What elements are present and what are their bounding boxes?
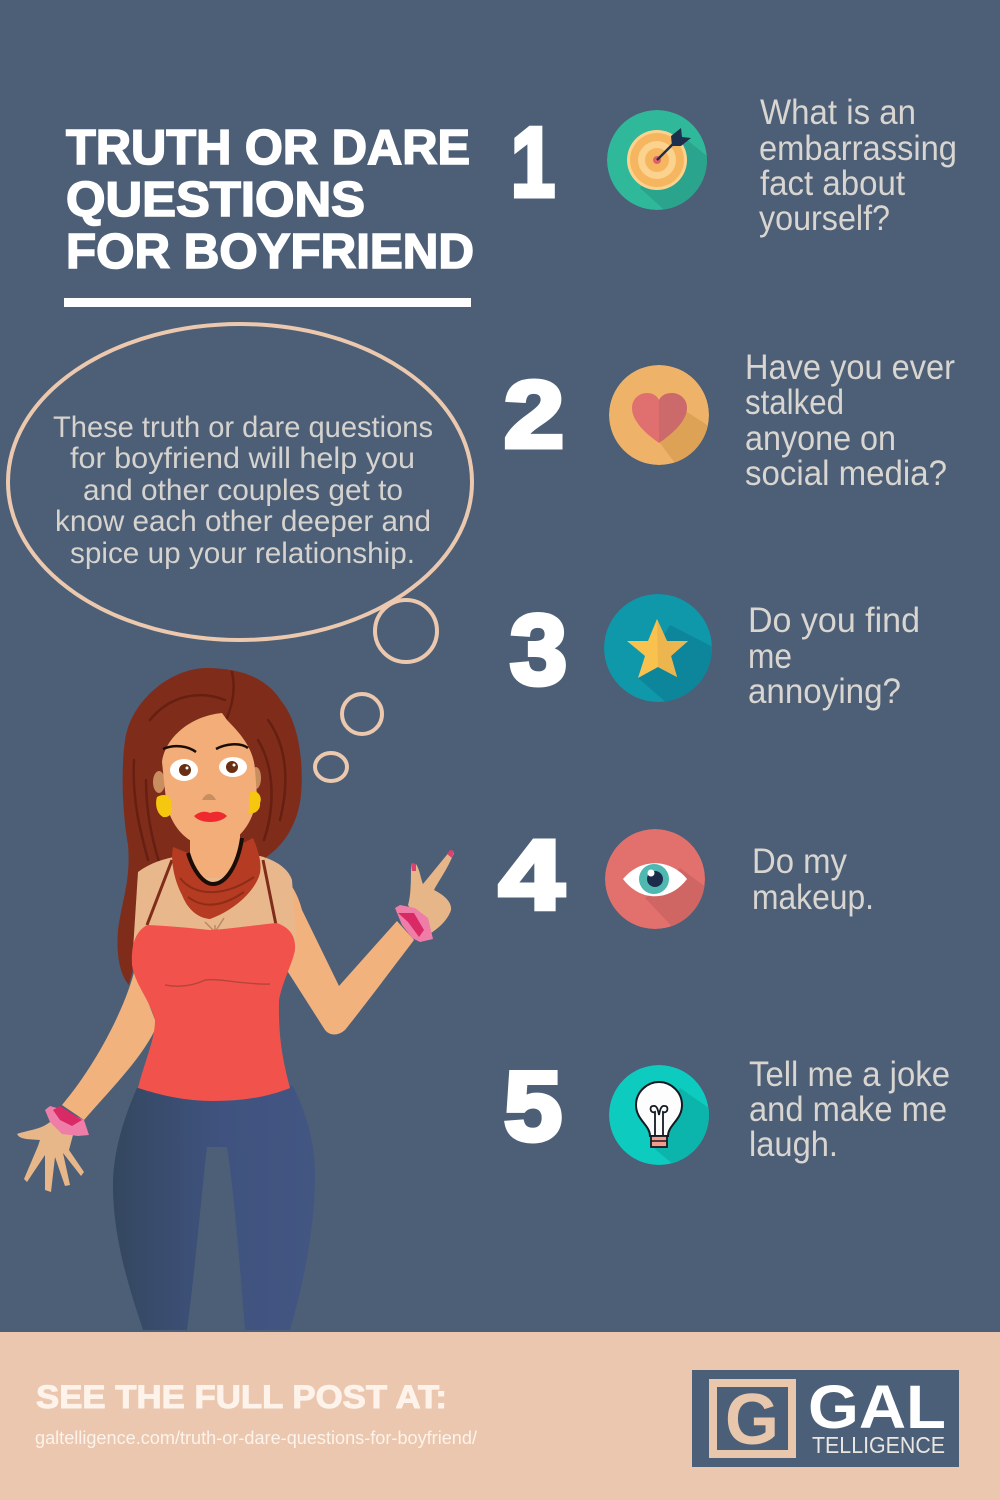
icon: light bulb <box>609 1065 712 1170</box>
question 4: Do my <box>752 842 847 881</box>
number 5: 5 <box>504 1051 562 1161</box>
icon: eye <box>605 829 705 929</box>
question 1: embarrassing <box>759 129 957 168</box>
bubble text: know each other deeper and <box>55 505 431 538</box>
eyes <box>170 757 247 781</box>
left scrunchie <box>45 1106 89 1136</box>
right hand <box>408 851 454 935</box>
number 3: 3 <box>510 594 567 705</box>
title: FOR BOYFRIEND <box>66 225 474 279</box>
number 1: 1 <box>511 107 555 217</box>
logo: TELLIGENCE <box>812 1432 945 1458</box>
top fold line <box>165 980 270 986</box>
bubble text: spice up your relationship. <box>70 537 415 570</box>
question 1: What is an <box>760 93 916 132</box>
lips <box>194 812 227 822</box>
title <box>66 121 474 279</box>
bubble text <box>53 411 433 570</box>
left arm <box>62 968 157 1120</box>
logo <box>692 1370 959 1467</box>
question 3: annoying? <box>748 672 901 711</box>
right arm <box>285 878 414 1034</box>
face <box>162 713 257 847</box>
question 3 <box>748 601 920 711</box>
right scrunchie <box>395 905 433 942</box>
thought bubble <box>8 324 472 781</box>
question 2: stalked <box>745 383 844 422</box>
icon: heart <box>609 365 709 465</box>
question 5 <box>749 1055 950 1164</box>
number 4: 4 <box>499 820 564 930</box>
neck <box>190 825 240 878</box>
logo: G <box>725 1380 779 1460</box>
fingernails <box>411 850 454 871</box>
character: woman pointing <box>17 668 454 1330</box>
question 4 <box>752 842 874 917</box>
halter straps <box>147 860 276 925</box>
earrings <box>156 792 261 817</box>
hair back <box>117 668 302 985</box>
scarf <box>172 838 261 919</box>
question 4: makeup. <box>752 878 874 917</box>
icon: target <box>607 110 712 215</box>
question 1: fact about <box>760 164 905 203</box>
footer call to action: SEE THE FULL POST AT: <box>36 1379 447 1415</box>
jeans <box>113 1086 315 1330</box>
hair strands <box>134 672 285 865</box>
icon: star <box>604 594 715 710</box>
bubble text: and other couples get to <box>83 474 403 507</box>
question 2: anyone on <box>745 419 896 458</box>
question 3: Do you find <box>748 601 920 640</box>
footer url: galtelligence.com/truth-or-dare-questions-for-boyfriend/ <box>35 1428 477 1448</box>
chest <box>133 856 297 950</box>
bubble text: These truth or dare questions <box>53 411 433 444</box>
question 2: social media? <box>745 454 947 493</box>
question 2: Have you ever <box>745 348 955 387</box>
question 2 <box>745 348 955 493</box>
ears <box>153 771 165 793</box>
eyebrows <box>163 744 248 752</box>
nose <box>202 794 216 800</box>
left hand <box>17 1122 84 1192</box>
question 1: yourself? <box>759 199 890 238</box>
logo: GAL <box>808 1373 946 1441</box>
neck shadow <box>188 838 242 884</box>
question 5: laugh. <box>749 1125 838 1164</box>
red top <box>132 923 295 1101</box>
question 5: and make me <box>749 1090 947 1129</box>
scarf folds <box>180 877 254 905</box>
question 5: Tell me a joke <box>749 1055 950 1094</box>
bubble text: for boyfriend will help you <box>70 442 415 475</box>
title: TRUTH OR DARE <box>66 121 470 175</box>
necklace <box>205 918 224 944</box>
question 3: me <box>748 637 792 676</box>
question 1 <box>759 93 957 238</box>
title: QUESTIONS <box>66 173 365 227</box>
number 2: 2 <box>504 362 564 468</box>
title underline <box>64 298 471 307</box>
footer band <box>0 1332 1000 1500</box>
